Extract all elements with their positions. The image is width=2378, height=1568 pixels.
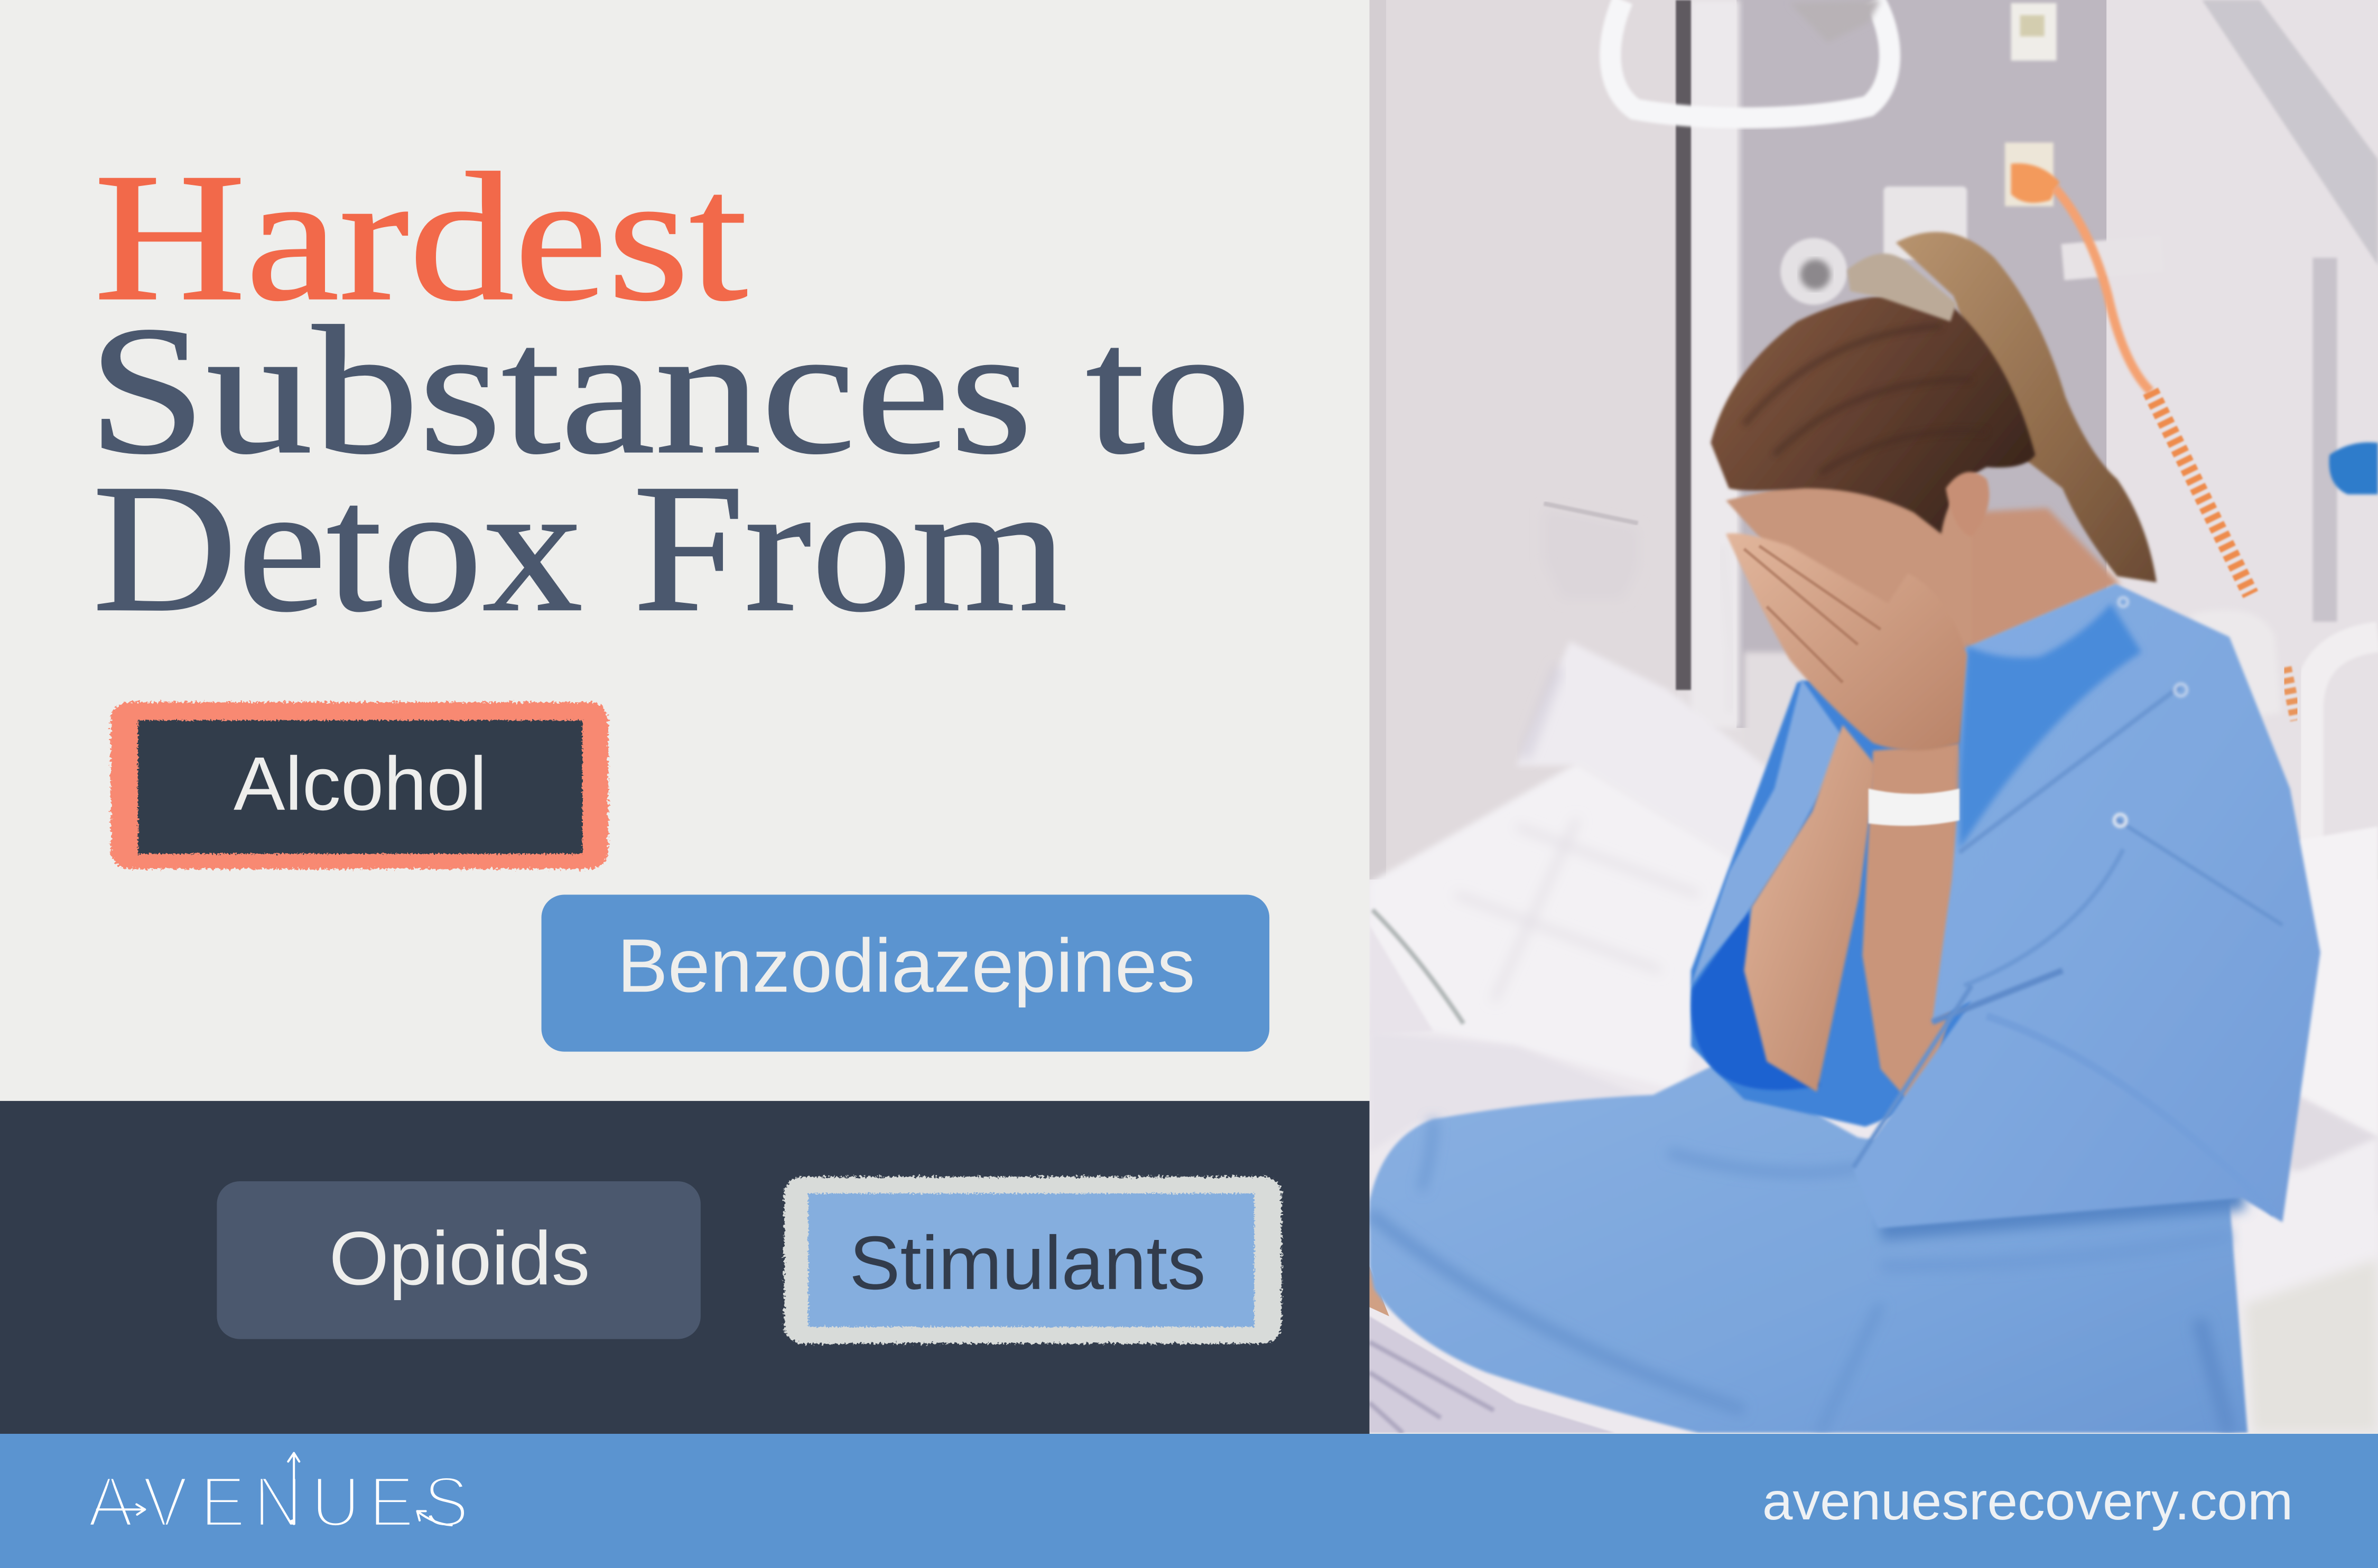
label: Opioids — [217, 1181, 701, 1339]
label: Benzodiazepines — [542, 895, 1269, 1052]
label: Stimulants: Stimulants — [849, 1221, 1206, 1305]
forearms — [1744, 725, 1972, 1117]
panel: light title background — [0, 0, 1370, 1101]
label: Benzodiazepines: Benzodiazepines — [617, 923, 1195, 1008]
neck — [1911, 508, 2120, 649]
upper gown — [1853, 584, 2320, 1228]
footer bar — [0, 1434, 2378, 1568]
label: Alcohol — [111, 702, 608, 869]
left sleeve — [1691, 679, 1847, 986]
bed and pillows — [1370, 641, 2378, 1433]
inner blue gown behind arms — [1689, 678, 1972, 1129]
hospital room background — [1370, 0, 2378, 880]
hair strands — [1744, 326, 1987, 473]
gown folds — [1370, 1119, 2244, 1433]
panel: dark lower band — [0, 1101, 1370, 1434]
logo arrows — [97, 1453, 452, 1525]
title line: Detox From: Detox From — [92, 447, 1067, 650]
label: Opioids: Opioids — [329, 1216, 590, 1301]
ponytail — [1896, 232, 2157, 582]
hair — [1711, 295, 2035, 534]
label: Stimulants — [784, 1177, 1281, 1343]
website url: avenuesrecovery.com — [1762, 1472, 2293, 1531]
logo wordmark: AVENUES — [88, 1462, 469, 1542]
logo: Avenues — [88, 1453, 469, 1542]
title line: Substances to: Substances to — [88, 289, 1251, 492]
title line: Hardest: Hardest — [94, 136, 748, 339]
title — [88, 136, 1251, 650]
ear — [1946, 472, 1989, 537]
chest inner gown — [1959, 603, 2141, 849]
photo: patient sitting on hospital bed covering her face — [1370, 0, 2378, 1433]
face — [1726, 462, 1972, 652]
label: Alcohol: Alcohol — [234, 742, 487, 826]
dark sleeve interior — [1692, 910, 1820, 1090]
scrunchie — [1847, 254, 1956, 322]
hospital wristband — [1869, 789, 1959, 826]
gown sleeve detail — [1853, 598, 2282, 1213]
hands covering face — [1726, 533, 1967, 751]
woman's gown lower body — [1370, 1061, 2247, 1433]
